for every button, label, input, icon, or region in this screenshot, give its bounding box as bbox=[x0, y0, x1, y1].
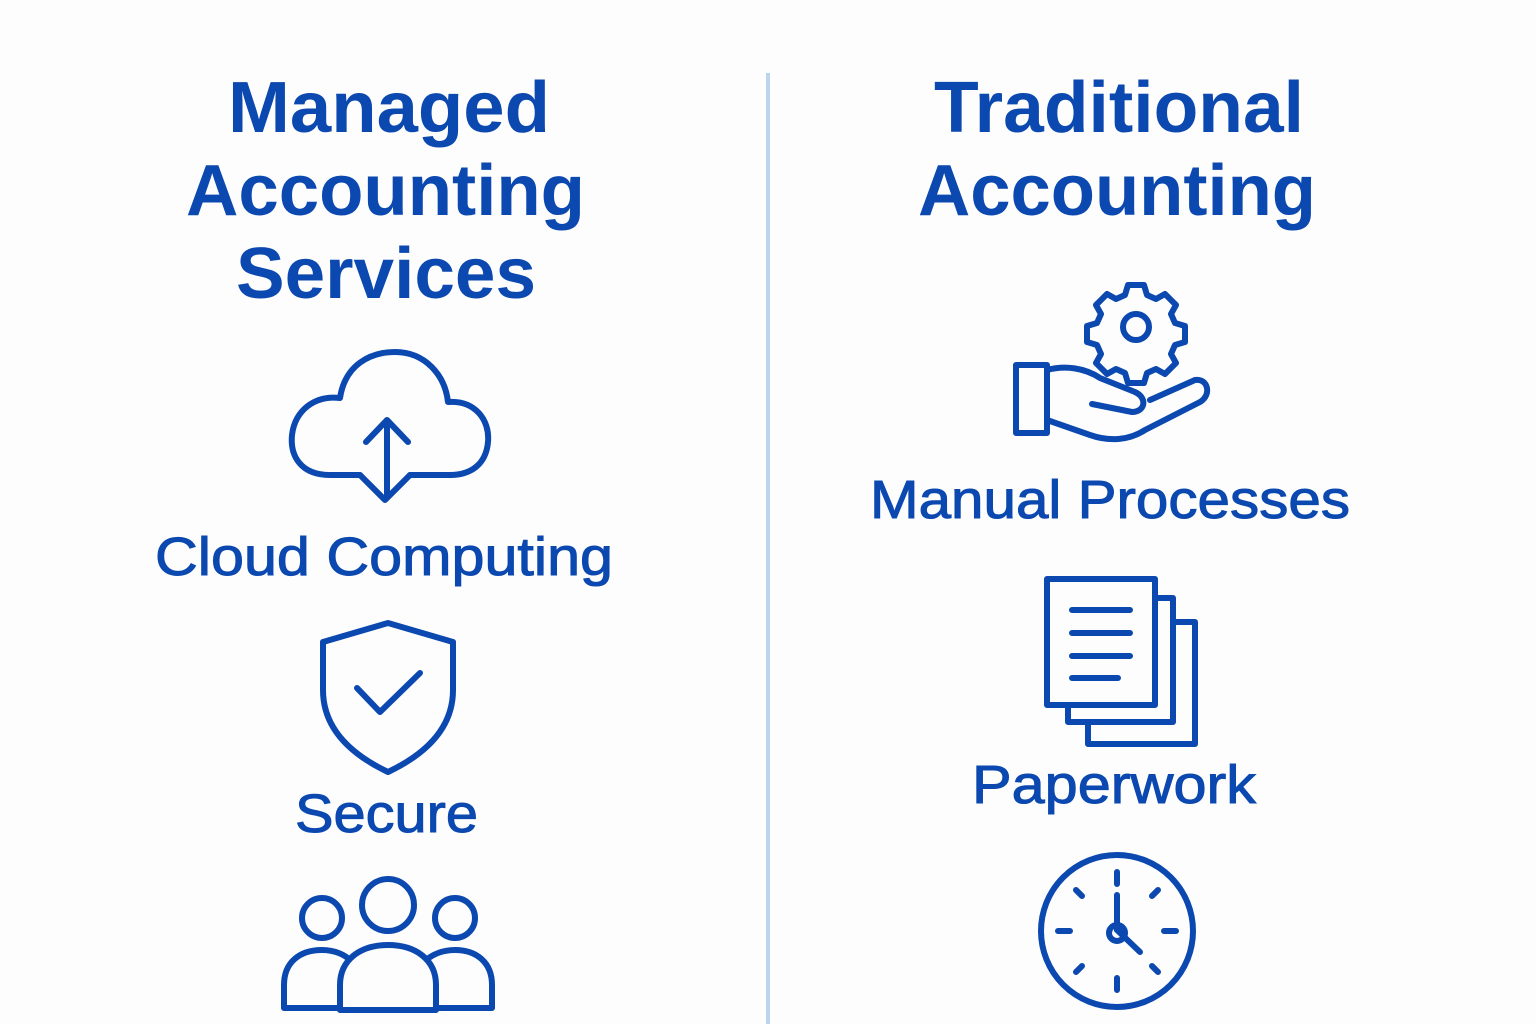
label: cloud computing: Cloud Computing bbox=[155, 527, 613, 587]
icon: clock bbox=[1041, 855, 1193, 1007]
title: managed accounting services: Accounting bbox=[186, 151, 585, 231]
icon: people group bbox=[284, 879, 492, 1010]
title: managed accounting services bbox=[186, 68, 585, 314]
title: traditional accounting: Traditional bbox=[934, 68, 1304, 148]
icon: gear in hand bbox=[1016, 285, 1207, 439]
label: secure: Secure bbox=[295, 784, 478, 844]
label: paperwork: Paperwork bbox=[972, 755, 1257, 815]
icon: paperwork stack bbox=[1047, 579, 1195, 744]
divider line bbox=[766, 73, 770, 1024]
icon: cloud upload bbox=[292, 352, 488, 500]
title: traditional accounting bbox=[918, 68, 1316, 231]
title: traditional accounting: Accounting bbox=[918, 151, 1316, 231]
title: managed accounting services: Managed bbox=[228, 68, 550, 148]
label: manual processes: Manual Processes bbox=[870, 470, 1350, 530]
icon: shield check bbox=[323, 623, 453, 772]
title: managed accounting services: Services bbox=[236, 234, 536, 314]
